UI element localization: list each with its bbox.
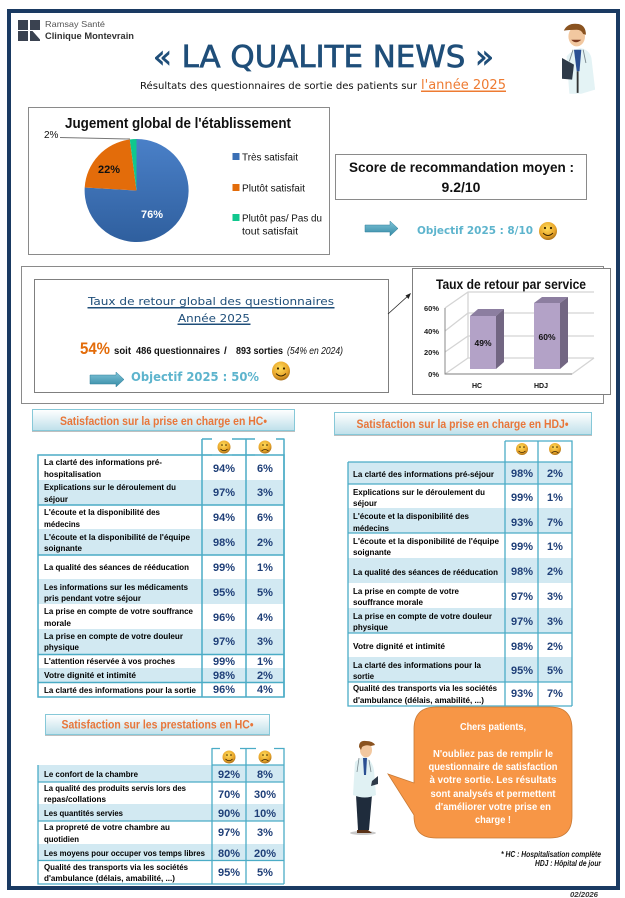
values: 3% [257,636,273,648]
category labels: HC [472,383,482,390]
row labels [353,469,499,705]
values: 6% [257,512,273,524]
callout: message aux patients: N'oubliez pas de remplir le [433,749,553,760]
row labels: médecins [44,519,80,529]
values: 5% [257,587,273,599]
row labels: souffrance morale [353,597,423,607]
row labels: hospitalisation [44,469,101,479]
row labels: Votre dignité et intimité [44,670,136,680]
leader line [60,138,130,139]
row labels: L'attention réservée à vos proches [44,656,175,666]
row labels: La clarté des informations pour la [353,660,481,670]
callout: message aux patients: questionnaire de satisfaction [428,762,558,773]
values: 96% [213,684,235,696]
objectif: Objectif 2025 : 50% [131,370,259,384]
subtitle: l'année 2025 [421,78,506,93]
row labels: La qualité des produits servis lors des [44,783,186,793]
legend [232,152,322,238]
panel: taux de retour global: Année 2025 [178,313,250,325]
callout: message aux patients: Chers patients, [460,722,526,733]
pie: 76% blue [85,139,189,242]
panel: pie chart Jugement global [28,108,330,254]
values: 2% [547,566,563,578]
values: 95% [213,587,235,599]
axis labels [424,304,439,379]
arrow: connector to chart [388,293,411,314]
row labels: séjour [353,498,378,508]
panel: taux de retour global [34,280,388,392]
row labels: soignante [353,547,391,557]
values: 93% [511,688,533,700]
logo: Ramsay Santé: Ramsay Santé [45,19,105,29]
title: « LA QUALITE NEWS » [153,40,494,75]
values: 30% [254,789,276,801]
callout: message aux patients: charge ! [475,815,511,826]
panel: bar chart taux de retour par service: HDJ [534,383,548,390]
logo: Ramsay Santé [18,19,134,41]
values: 2% [257,670,273,682]
values: 98% [213,670,235,682]
row labels: pris pendant votre séjour [44,593,142,603]
row labels: Les quantités servies [44,808,123,818]
row labels: La prise en compte de votre douleur [44,631,184,641]
stat: 54% [80,339,110,358]
row labels: Qualité des transports via les sociétés [353,683,497,693]
row labels: d'ambulance (délais, amabilité, ...) [44,873,175,883]
bar: HC 49% [470,309,504,369]
values: 6% [257,463,273,475]
row labels: sortie [353,671,374,681]
row labels: La qualité des séances de rééducation [44,562,189,572]
legend: Plutôt pas/ Pas du [242,214,322,224]
values: 1% [257,656,273,668]
smileys [222,750,272,764]
row labels: L'écoute et la disponibilité de l'équipe [44,532,190,542]
row labels: L'écoute et la disponibilité des [353,511,469,521]
values [218,769,276,879]
banner: Satisfaction HDJ [334,412,592,436]
row labels: La prise en compte de votre douleur [353,611,493,621]
values: 5% [257,867,273,879]
heading: Taux de retour global des questionnaires [87,296,334,308]
values: 99% [511,541,533,553]
panel: taux de retour outer [22,266,604,404]
values: 7% [547,517,563,529]
row labels: Les informations sur les médicaments [44,582,188,592]
row labels [44,769,205,883]
row labels: d'ambulance (délais, amabilité, ...) [353,695,484,705]
panel: taux de retour global: / [224,346,227,357]
values: 80% [218,848,240,860]
legend: Très satisfait [242,152,298,164]
arrow [90,372,124,387]
panel: taux de retour global: (54% en 2024) [287,346,343,357]
values: 8% [257,769,273,781]
values: 10% [254,808,276,820]
panel: pie chart Jugement global: 2% [44,130,59,141]
bar: HDJ 60%: 60% [538,332,556,342]
smileys [218,440,272,454]
values: 92% [218,769,240,781]
values: 3% [547,616,563,628]
icon: smiley [539,222,557,240]
row labels: soignante [44,543,82,553]
values: 2% [257,537,273,549]
values [511,468,563,700]
logo: Ramsay Santé: Clinique Montevrain [45,31,134,41]
panel: bar chart taux de retour par service [412,268,610,394]
row labels: quotidien [44,834,79,844]
row labels: L'écoute et la disponibilité de l'équipe [353,536,499,546]
axis labels: 0% [428,370,439,379]
row labels: séjour [44,494,69,504]
gridlines [445,292,594,374]
table: prestations HC [38,748,284,884]
callout: message aux patients [388,707,572,838]
values: 7% [547,688,563,700]
objectif score: Objectif 2025 : 8/10 [417,225,533,237]
icon: doctor top right [562,24,595,94]
panel: pie chart Jugement global: 22% [98,164,120,176]
values: 20% [254,848,276,860]
row labels: Le confort de la chambre [44,769,138,779]
values: 97% [218,827,240,839]
values: 3% [257,827,273,839]
values: 97% [213,636,235,648]
panel: score de recommandation [336,154,586,200]
footnote: * HC : Hospitalisation complète [501,850,601,859]
banner: Satisfaction HC: Satisfaction sur la prise en charge en HC• [60,414,267,428]
bar: HDJ 60% [534,297,568,369]
row labels: Explications sur le déroulement du [44,482,176,492]
row labels: repas/collations [44,794,106,804]
values: 98% [511,641,533,653]
values: 99% [213,562,235,574]
values: 95% [218,867,240,879]
footnote [501,850,602,868]
chart title: Jugement global de l'établissement [65,116,291,132]
axis labels: 20% [424,348,439,357]
callout: message aux patients: d'améliorer votre prise en [435,802,551,813]
panel: score de recommandation: 9.2/10 [442,179,481,195]
banner: Satisfaction HDJ: Satisfaction sur la prise en charge en HDJ• [356,417,568,431]
values: 5% [547,665,563,677]
values: 1% [257,562,273,574]
row labels: Explications sur le déroulement du [353,487,485,497]
row labels: Qualité des transports via les sociétés [44,862,188,872]
row labels: physique [44,642,79,652]
banner: Satisfaction prestations HC: Satisfaction sur les prestations en HC• [62,718,254,732]
values: 3% [547,591,563,603]
axis labels: 60% [424,304,439,313]
row labels: La prise en compte de votre [353,586,459,596]
values: 3% [257,487,273,499]
values: 2% [547,468,563,480]
values: 99% [213,656,235,668]
legend: tout satisfait [242,226,298,238]
values: 97% [511,591,533,603]
banner: Satisfaction prestations HC [45,714,270,736]
legend: Plutôt satisfait [242,184,305,194]
banner: Satisfaction HC [32,410,295,432]
pie: 2% green [130,139,136,190]
values: 1% [547,492,563,504]
panel: score de recommandation: Score de recommandation moyen : [349,159,574,175]
table: prise en charge HDJ [348,441,572,706]
values: 90% [218,808,240,820]
values: 93% [511,517,533,529]
values: 97% [213,487,235,499]
values: 98% [511,566,533,578]
row labels: Votre dignité et intimité [353,641,445,651]
pie: 22% orange [85,140,136,190]
values: 98% [511,468,533,480]
callout: message aux patients: sont analysés et permettent [430,789,556,800]
footnote: HDJ : Hôpital de jour [535,859,602,868]
row labels: La prise en compte de votre souffrance [44,606,193,616]
subtitle: Résultats des questionnaires de sortie des patients sur [140,80,418,92]
table: prise en charge HC [38,439,284,697]
row labels: Les moyens pour occuper vos temps libres [44,848,205,858]
values: 4% [257,612,273,624]
values: 94% [213,512,235,524]
row labels: L'écoute et la disponibilité des [44,507,160,517]
values: 2% [547,641,563,653]
row labels: La propreté de votre chambre au [44,822,170,832]
values [213,463,273,696]
values: 99% [511,492,533,504]
subtitle [140,78,506,93]
smileys [516,443,561,455]
row labels: La clarté des informations pré- [44,457,162,467]
values: 94% [213,463,235,475]
panel: taux de retour global: 893 sorties [236,346,283,357]
row labels: physique [353,622,388,632]
row labels: La clarté des informations pré-séjour [353,469,495,479]
chart title: Taux de retour par service [436,276,586,292]
arrow: objectif score [365,221,398,236]
values: 98% [213,537,235,549]
values: 96% [213,612,235,624]
callout: message aux patients: à votre sortie. Les résultats [430,775,557,786]
row labels: La clarté des informations pour la sortie [44,685,196,695]
values: 95% [511,665,533,677]
panel: taux de retour global: soit [114,346,132,357]
row labels [44,457,196,695]
row labels: médecins [353,523,389,533]
bar: HC 49%: 49% [474,338,492,348]
values: 4% [257,684,273,696]
values: 97% [511,616,533,628]
panel: taux de retour global: 486 questionnaires [136,346,220,357]
icon: doctor bottom [350,741,378,835]
values: 1% [547,541,563,553]
panel: pie chart Jugement global: 76% [141,209,163,221]
row labels: La qualité des séances de rééducation [353,567,498,577]
icon: smiley [272,362,290,380]
row labels: morale [44,618,71,628]
axis labels: 40% [424,327,439,336]
values: 70% [218,789,240,801]
